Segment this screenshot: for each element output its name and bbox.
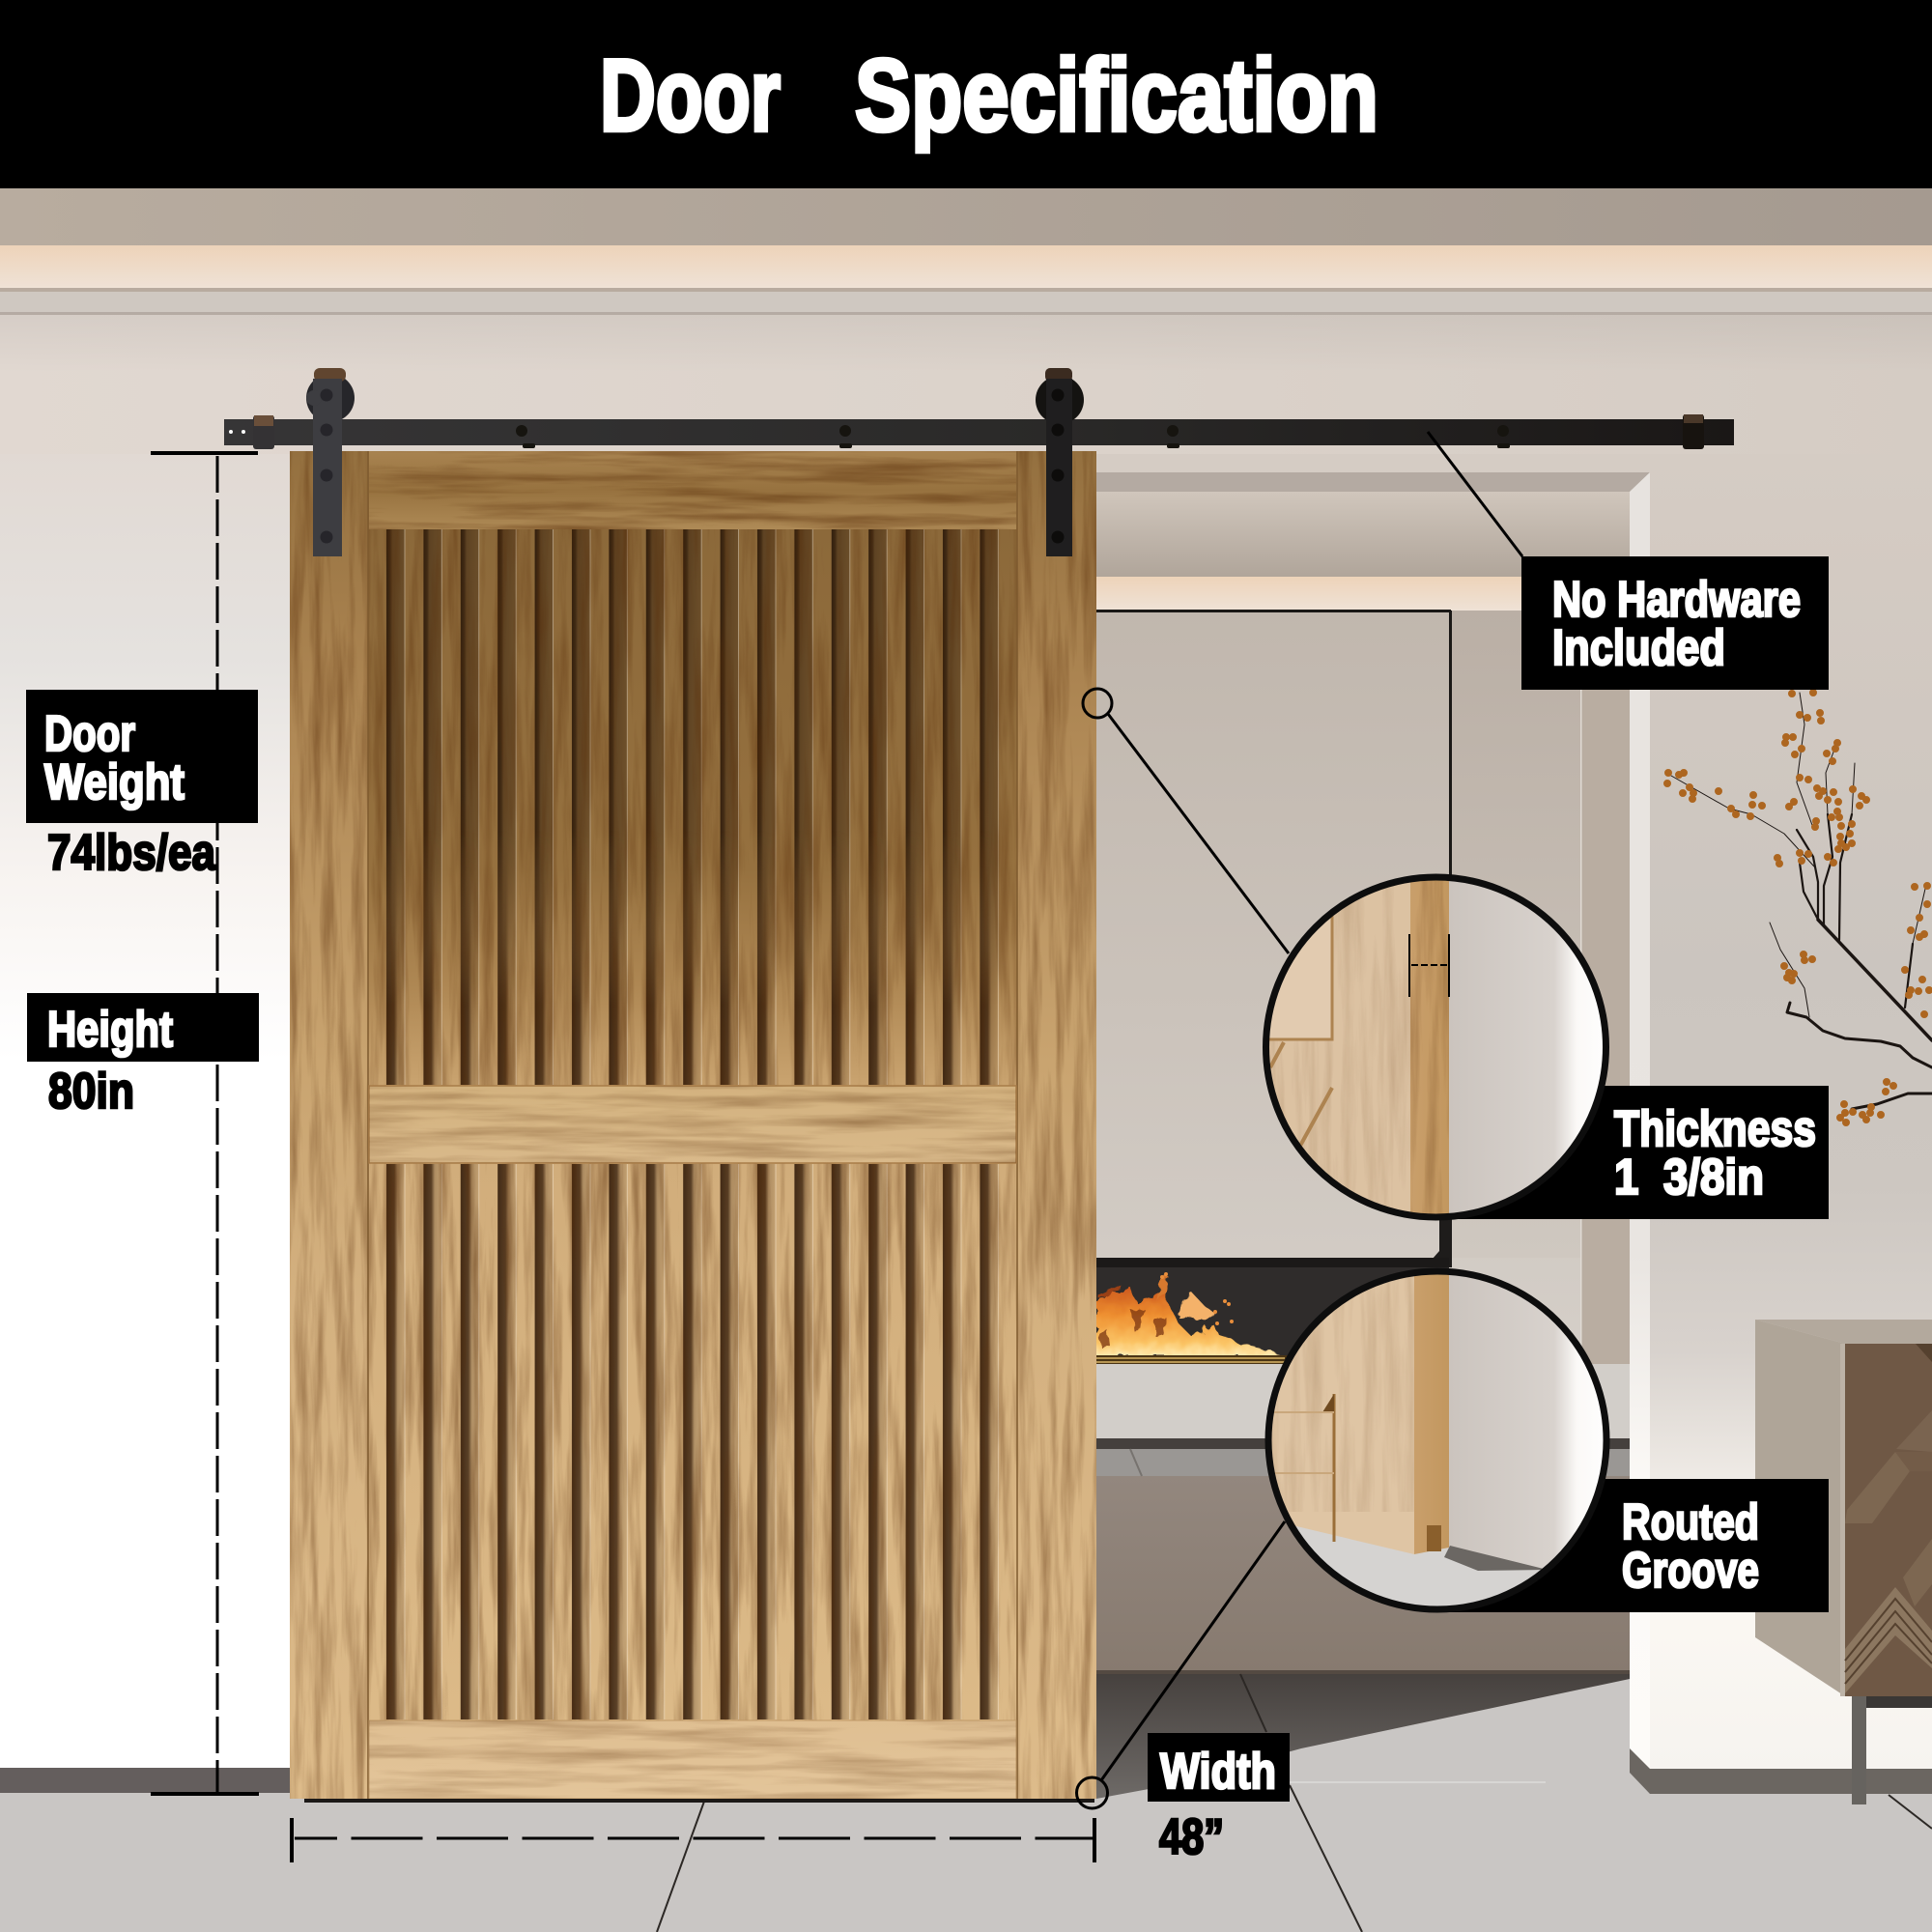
sliding track hardware (224, 368, 1734, 556)
marker and leader: width and groove (1076, 1521, 1285, 1808)
width label: Width (1160, 1744, 1276, 1800)
cabinet (1755, 1320, 1932, 1804)
cabinet legs (1852, 1696, 1932, 1804)
door weight label: Weight (44, 754, 185, 810)
magnifier: routed groove (1256, 1265, 1613, 1623)
title bar: Specification (855, 39, 1378, 153)
stile seams (368, 451, 1017, 1799)
flames (1096, 1275, 1283, 1356)
right wall (309, 454, 1932, 1774)
left wall (0, 454, 309, 1774)
title bar (0, 0, 1932, 188)
height value: 80in (48, 1064, 134, 1120)
upper wall (0, 315, 1932, 454)
bottom rail (369, 1720, 1016, 1799)
door weight label: Door (44, 706, 135, 762)
left stop (253, 415, 274, 449)
routed groove label: Routed (1622, 1494, 1759, 1550)
thickness label: 1 3/8in (1614, 1150, 1764, 1206)
routed groove label (1449, 1479, 1829, 1612)
height dimension line (151, 451, 259, 1796)
left hanger strap (306, 368, 355, 556)
thickness label: Thickness (1614, 1101, 1816, 1157)
height label: Height (47, 1002, 173, 1058)
chevron carving (1845, 1587, 1932, 1693)
barn door (290, 451, 1096, 1803)
slats upper panel narrow shadow (386, 529, 999, 974)
right stop (1683, 414, 1704, 449)
routed groove label: Groove (1622, 1543, 1759, 1599)
top rail (369, 451, 1016, 529)
callout line to track (1428, 432, 1522, 556)
slats lower panel (368, 1164, 1017, 1719)
ceiling band (0, 188, 1932, 245)
weight value: 74lbs/ea (47, 825, 216, 881)
thickness label (1439, 1086, 1829, 1219)
title bar: Door (600, 39, 781, 153)
door stiles and base (290, 451, 1096, 1799)
no hardware label (1521, 556, 1829, 690)
no hardware label: No Hardware (1552, 572, 1801, 628)
jamb (1630, 472, 1650, 1777)
floor (0, 1793, 1932, 1932)
middle rail (369, 1086, 1016, 1163)
door floor shadow (304, 1799, 1094, 1803)
tile joints (657, 1674, 1932, 1932)
height label (27, 993, 259, 1062)
floor shadow (1096, 1674, 1630, 1799)
right hanger strap (1036, 368, 1084, 556)
cove light (0, 245, 1932, 288)
door weight label (26, 690, 258, 823)
magnifier: door thickness (1256, 869, 1623, 1227)
fireplace (1096, 1258, 1449, 1364)
right baseboard (1630, 1748, 1932, 1794)
no hardware label: Included (1552, 620, 1725, 676)
left baseboard (0, 1768, 290, 1794)
width value: 48” (1159, 1809, 1224, 1865)
track bar (224, 419, 1734, 445)
slats upper panel wide shadow (386, 858, 999, 1085)
plant branches with berries (1667, 693, 1932, 1122)
panel wood (368, 529, 1017, 1719)
vertical wood grain (290, 451, 1096, 1799)
marker and leader: thickness (1083, 689, 1289, 953)
opening interior (1096, 472, 1650, 1680)
width dimension line (290, 1818, 1096, 1862)
wall bolts (516, 425, 1510, 448)
holes (229, 430, 233, 434)
